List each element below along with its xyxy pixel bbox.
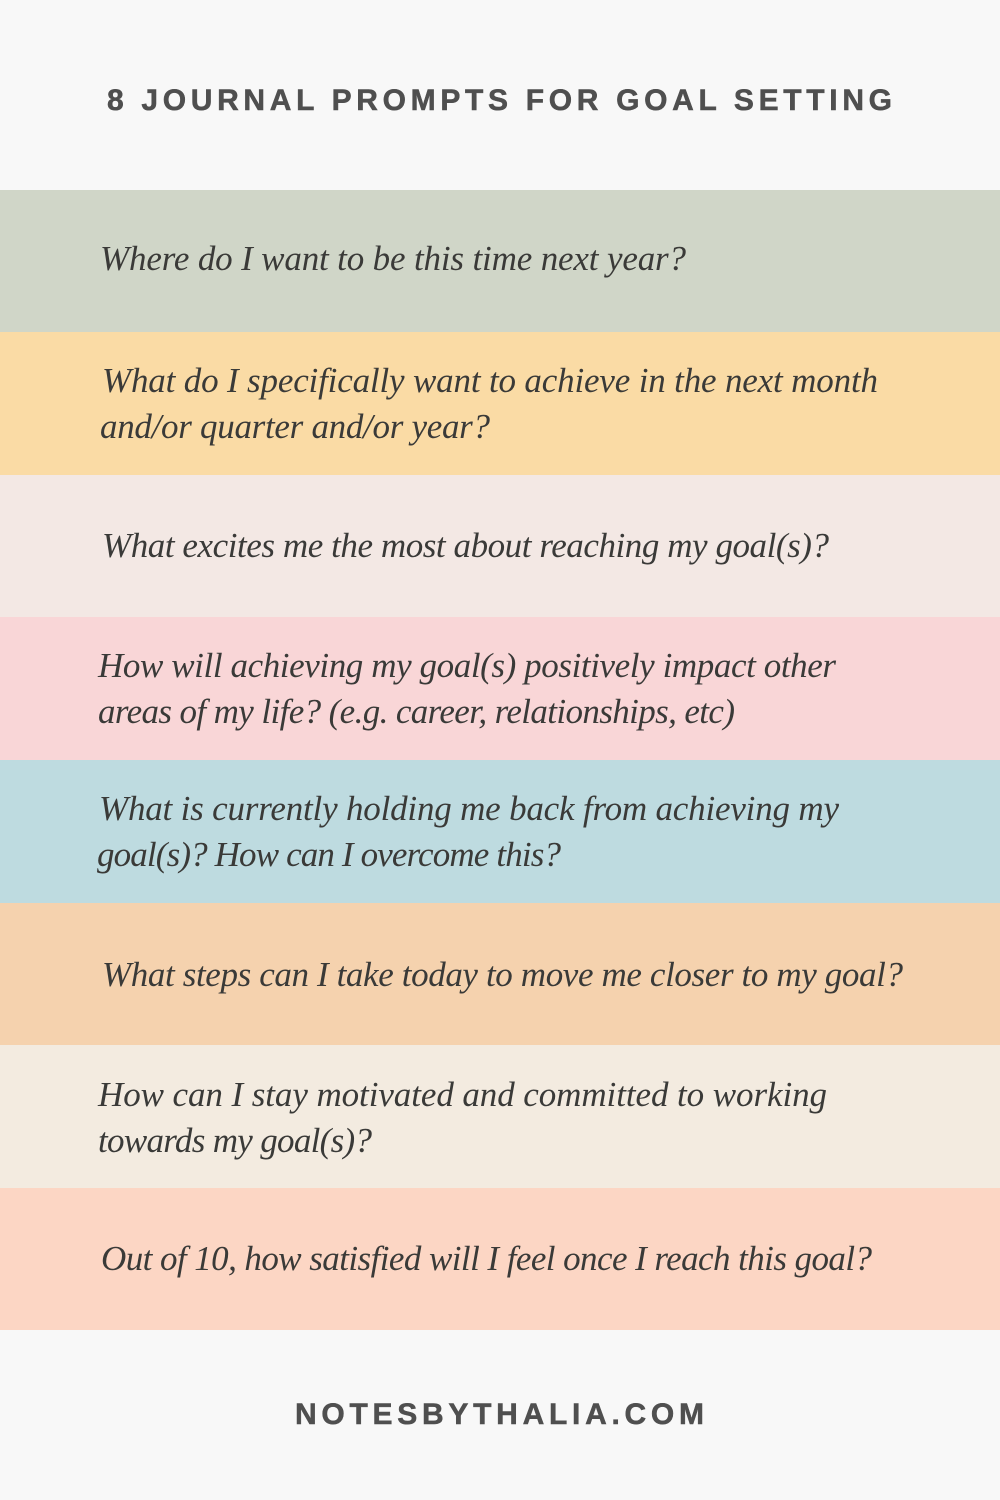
panel: prompt 7: towards my goal(s)? — [98, 1121, 372, 1160]
panel: prompt 1: Where do I want to be this time next year? — [100, 239, 686, 278]
panel: prompt 4: areas of my life? (e.g. career, relationships, etc) — [98, 692, 735, 731]
panel: prompt 7: How can I stay motivated and committed to working — [97, 1075, 827, 1114]
panel: prompt 6 — [0, 903, 1000, 1045]
panel: prompt 7 — [0, 1045, 1000, 1188]
panel: prompt 4: How will achieving my goal(s) positively impact other — [97, 646, 836, 685]
panel: prompt 8 — [0, 1188, 1000, 1330]
panel: prompt 6: What steps can I take today to move me closer to my goal? — [102, 955, 904, 994]
panel: prompt 5: goal(s)? How can I overcome this? — [97, 835, 562, 874]
panel: prompt 2: What do I specifically want to achieve in the next month — [102, 361, 878, 400]
title: 8 JOURNAL PROMPTS FOR GOAL SETTING — [107, 84, 892, 117]
footer website: NOTESBYTHALIA.COM — [295, 1398, 704, 1431]
panel: prompt 1 — [0, 190, 1000, 332]
panel: prompt 5 — [0, 760, 1000, 903]
panel: prompt 2: and/or quarter and/or year? — [100, 407, 490, 446]
panel: prompt 5: What is currently holding me back from achieving my — [99, 789, 839, 828]
panel: prompt 8: Out of 10, how satisfied will I feel once I reach this goal? — [101, 1239, 872, 1278]
panel: prompt 4 — [0, 617, 1000, 760]
panel: prompt 3: What excites me the most about reaching my goal(s)? — [102, 526, 830, 565]
panel: prompt 3 — [0, 475, 1000, 617]
panel: prompt 2 — [0, 332, 1000, 475]
